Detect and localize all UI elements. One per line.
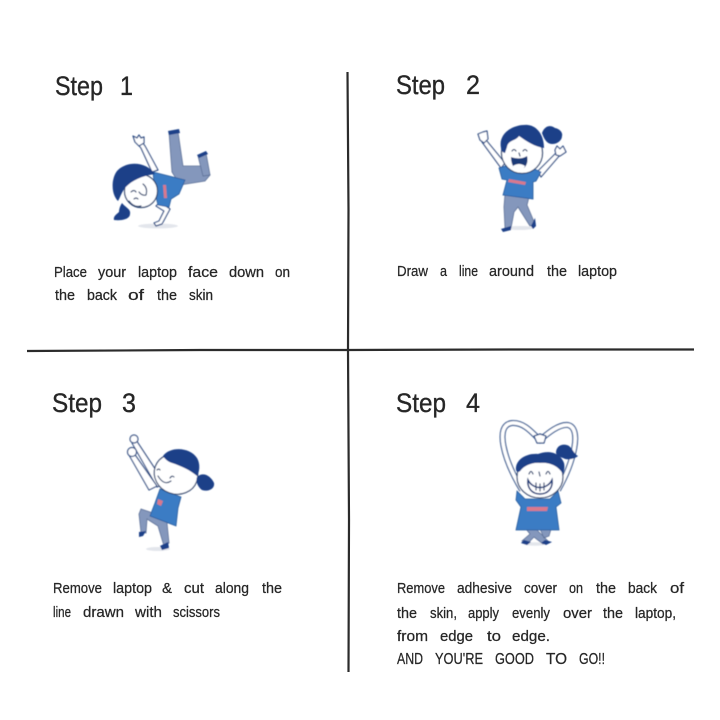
heading: step 3: 3 (122, 388, 136, 418)
text: step 4 instructions: evenly (512, 605, 550, 622)
text: step 4 instructions: back (628, 580, 657, 597)
panel: step 3 (52, 388, 282, 621)
illustration: cheering girl (478, 125, 566, 232)
text: step 3 instructions: drawn (83, 604, 124, 621)
text: step 3 instructions: cut (184, 580, 205, 597)
heading: step 1: 1 (120, 71, 133, 101)
heading: step 2: 2 (466, 70, 480, 100)
text: step 1 instructions (54, 264, 290, 304)
text: step 4 instructions: the (397, 605, 417, 622)
text: step 4 instructions: to (487, 628, 501, 645)
text: step 2 instructions: around (489, 263, 534, 280)
text: step 3 instructions (53, 580, 282, 621)
text: step 4 instructions: TO (546, 651, 567, 668)
text: step 1 instructions: the (55, 287, 75, 304)
text: step 4 instructions: Remove (397, 580, 445, 597)
text: step 3 instructions: line (53, 604, 71, 621)
text: step 2 instructions: laptop (578, 263, 617, 280)
text: step 1 instructions: back (87, 287, 117, 304)
text: step 3 instructions: laptop (113, 580, 152, 597)
text: step 4 instructions: AND (397, 651, 423, 668)
text: step 4 instructions: on (569, 580, 583, 597)
text: step 3 instructions: with (134, 604, 162, 621)
text: step 1 instructions: laptop (138, 264, 177, 281)
text: step 2 instructions: line (459, 263, 478, 280)
text: step 1 instructions: face (188, 264, 218, 281)
text: step 3 instructions: the (262, 580, 282, 597)
text: step 4 instructions: edge. (512, 628, 550, 645)
text: step 4 instructions: laptop, (635, 605, 676, 622)
text: step 3 instructions: Remove (53, 580, 102, 597)
illustration: cartwheeling girl (113, 129, 210, 228)
heading: step 3: Step (52, 388, 102, 418)
text: step 3 instructions: scissors (173, 604, 220, 621)
panel: step 1 (54, 71, 290, 304)
text: step 1 instructions: Place (54, 264, 87, 281)
heading: step 1: Step (55, 71, 103, 101)
text: step 2 instructions: the (547, 263, 567, 280)
text: step 3 instructions: & (162, 580, 172, 597)
text: step 4 instructions: the (603, 605, 623, 622)
text: step 4 instructions: skin, (430, 605, 457, 622)
heading: step 4: Step (396, 388, 446, 418)
heading: step 4: 4 (466, 388, 480, 418)
text: step 1 instructions: skin (189, 287, 213, 304)
text: step 1 instructions: down (229, 264, 264, 281)
panel: step 4 (396, 388, 685, 668)
text: step 4 instructions: the (596, 580, 616, 597)
text: step 4 instructions: edge (440, 628, 473, 645)
text: step 1 instructions: the (157, 287, 177, 304)
text: step 2 instructions: Draw (397, 263, 428, 280)
text: step 1 instructions: your (98, 264, 126, 281)
text: step 3 instructions: along (215, 580, 249, 597)
illustration: girl reaching up (128, 435, 214, 551)
text: step 4 instructions: over (563, 605, 592, 622)
text: step 4 instructions: adhesive (457, 580, 512, 597)
text: step 4 instructions: apply (468, 605, 499, 622)
text: step 4 instructions: YOU'RE (435, 651, 483, 668)
text: step 1 instructions: on (275, 264, 290, 281)
illustration: girl making heart with arms (503, 423, 578, 546)
text: step 4 instructions: from (397, 628, 428, 645)
text: step 4 instructions: GOOD (495, 651, 534, 668)
text: step 1 instructions: of (128, 287, 145, 304)
panel: step 2 (396, 70, 617, 280)
text: step 4 instructions: GO!! (579, 651, 605, 668)
text: step 4 instructions: of (670, 580, 685, 597)
text: step 4 instructions: cover (524, 580, 557, 597)
heading: step 2: Step (396, 70, 445, 100)
text: step 4 instructions (397, 580, 685, 668)
text: step 2 instructions: a (440, 263, 448, 280)
